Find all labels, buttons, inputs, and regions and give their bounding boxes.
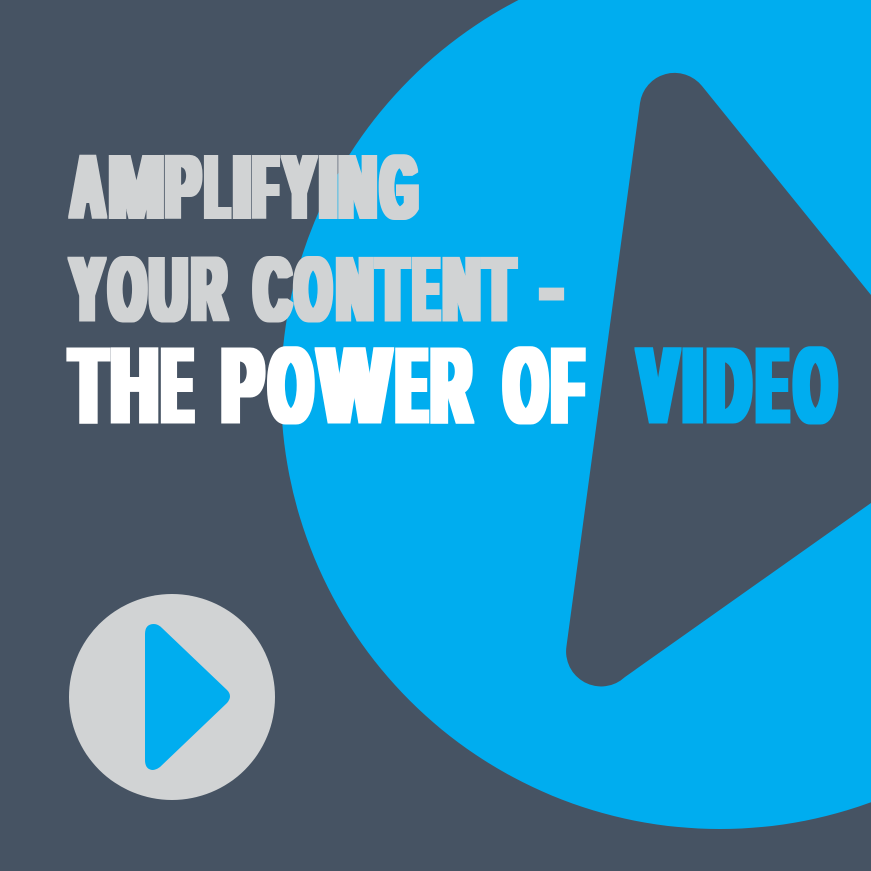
title word: VIDEO: V [639,325,677,445]
title line: AMPLIFYING: I [319,138,338,238]
title line: YOUR CONTENT -: N [444,240,480,341]
title line: THE POWER OF: T [71,325,106,445]
title line: THE POWER OF: H [112,325,158,445]
title word: VIDEO: I [683,325,703,445]
title line: THE POWER OF: P [222,325,263,445]
title word: VIDEO: D [708,325,750,445]
title line: YOUR CONTENT -: T [378,240,408,341]
title line: AMPLIFYING: Y [284,138,314,238]
title word: VIDEO: E [758,325,787,445]
title line: THE POWER OF: E [397,325,426,445]
title line: YOUR CONTENT -: T [484,240,514,341]
title line: YOUR CONTENT -: U [150,240,187,341]
title line: THE POWER OF: O [505,325,547,445]
title line: YOUR CONTENT - [71,237,562,341]
title line: THE POWER OF: E [163,325,192,445]
title line: YOUR CONTENT -: Y [71,240,103,341]
title line: YOUR CONTENT -: E [414,240,438,341]
title line: THE POWER OF [71,325,583,445]
title line: YOUR CONTENT -: - [541,237,562,338]
title line: AMPLIFYING: M [109,138,164,238]
title: F [553,325,582,445]
title line: YOUR CONTENT -: R [192,240,226,341]
title line: AMPLIFYING: N [339,138,376,238]
title line: AMPLIFYING: P [166,138,200,238]
title line: AMPLIFYING: I [233,138,251,238]
title line: AMPLIFYING: L [206,138,228,238]
icon: large blue circle with play triangle [281,0,871,829]
icon: small grey play button [69,594,275,800]
title line: THE POWER OF: O [270,325,312,445]
title line: THE POWER OF: R [432,325,471,445]
title line: AMPLIFYING: G [381,138,417,238]
title [71,138,836,445]
title line: YOUR CONTENT -: C [254,240,290,341]
title line: AMPLIFYING: F [254,138,277,238]
title line: YOUR CONTENT -: O [110,240,145,341]
title line: THE POWER OF: W [320,325,390,445]
title line: YOUR CONTENT -: O [296,240,331,341]
title line: YOUR CONTENT -: N [337,240,373,341]
title line: AMPLIFYING: A [72,138,104,238]
title word: VIDEO [639,325,836,445]
title line: AMPLIFYING [72,138,417,238]
